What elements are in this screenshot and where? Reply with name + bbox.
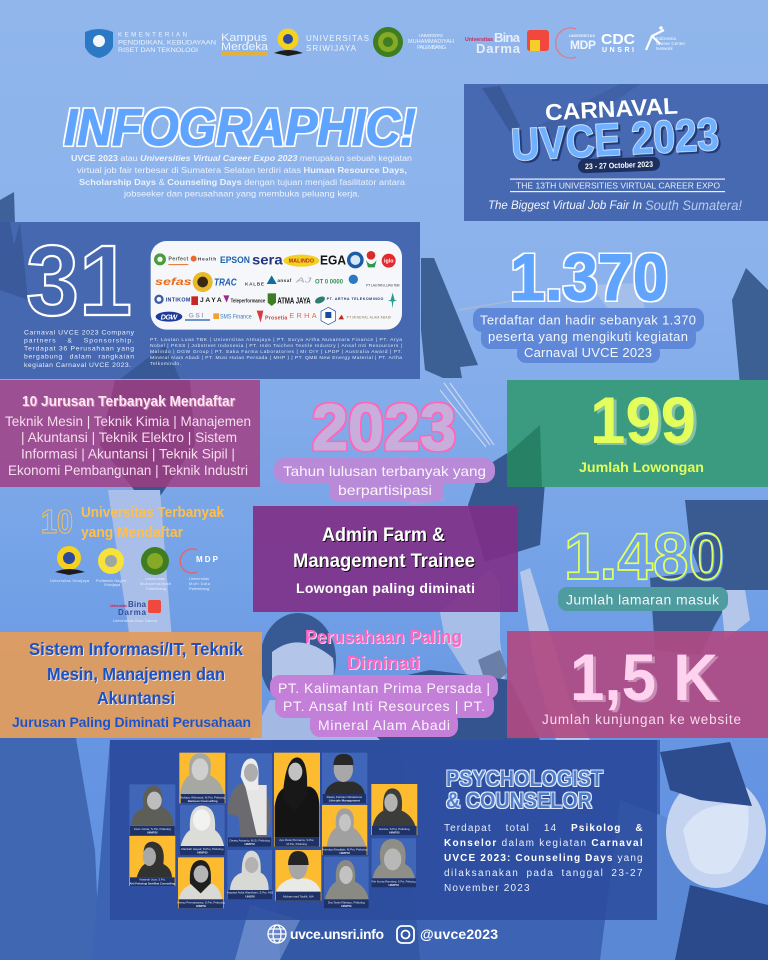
panel: 31 company partners bbox=[0, 222, 420, 379]
panel: 1,5 K website visits bbox=[507, 631, 768, 738]
panel: Carnaval UVCE 2023 banner bbox=[464, 84, 768, 221]
portrait: Hanna: Hanna, S.Psi, Psikolog bbox=[379, 827, 410, 831]
icon: globe bbox=[268, 925, 286, 943]
sponsor list text: Nobel | PKSS | Jobstreet Indonesia | PT. Indo Taichen Textile Industry | Ansaf Inti Resourcers | bbox=[150, 343, 402, 349]
logo: Kampus Merdeka: Kampus bbox=[221, 32, 268, 44]
counselor description: Terdapat total 14 Psikolog & bbox=[444, 823, 643, 834]
date pill: 23 - 27 October 2023 bbox=[585, 160, 654, 171]
portrait: Anindya Khadijah: Anindya Khadijah, M.Psi, Psikolog bbox=[322, 847, 368, 851]
portrait: Anindya Khadijah bbox=[322, 805, 368, 855]
portrait: Muhammad Taufik: Muhammad Taufik, MA bbox=[283, 895, 314, 899]
portrait: Hayatul Aulia: Hayatul Aulia Wardhani, S.Psi, MSi bbox=[227, 891, 273, 895]
sponsor row 3: PT. ARTHA TELEKOMINDO bbox=[327, 297, 383, 301]
university: Bina Darma: Darma bbox=[118, 608, 147, 617]
logo: Muhammadiyah Palembang: UNIVERSITAS bbox=[419, 33, 443, 38]
stat: Perusahaan Paling Diminati bbox=[270, 627, 498, 737]
logo: Muhammadiyah Palembang: MUHAMMADIYAH bbox=[408, 39, 454, 45]
partners caption: Terdapat 36 Perusahaan yang bbox=[24, 346, 134, 352]
partners caption: Carnaval UVCE 2023 Company bbox=[24, 330, 135, 336]
sponsor row 3: INTIKOM bbox=[166, 297, 191, 303]
stat: 1.370 participants bbox=[473, 240, 704, 363]
sponsor row 3 bbox=[154, 293, 397, 309]
sponsor row 2: ansaf bbox=[277, 278, 292, 283]
sponsor row 2: PT LAUTAN LUAS TBK bbox=[366, 284, 401, 288]
panel: 10 Jurusan Terbanyak Mendaftar bbox=[0, 380, 260, 487]
caption: Lowongan paling diminati bbox=[296, 580, 475, 596]
sponsor row 1: sera bbox=[252, 252, 283, 268]
counselor description: November 2023 bbox=[444, 883, 530, 894]
heading: UVCE 2023: UVCE 2023 bbox=[510, 109, 720, 170]
heading: CARNAVAL: CARNAVAL bbox=[544, 92, 679, 125]
portrait: Hasanah: Ahli Psikologi Sertifikat Counselling bbox=[130, 882, 176, 886]
tagline: The Biggest Virtual Job Fair In bbox=[488, 200, 642, 212]
major list: Mesin, Manajemen dan bbox=[47, 664, 225, 684]
panel: 10 universitas terbanyak bbox=[41, 503, 225, 623]
sponsor row 1: Perfect bbox=[168, 257, 189, 263]
portrait: Nessy Permatasary: Nessy Permatasary, S.Psi, Psikolog bbox=[177, 900, 225, 904]
heading: Universitas Terbanyak bbox=[81, 505, 225, 521]
major list bbox=[29, 639, 243, 708]
logo: Kementerian: KEMENTERIAN bbox=[118, 32, 187, 38]
sponsor row 4: DGW bbox=[161, 312, 178, 321]
sponsor row 2: KALBE bbox=[245, 282, 264, 287]
university: Sriwijaya bbox=[50, 546, 90, 583]
list of majors: Ekonomi Pembangunan | Teknik Industri bbox=[8, 462, 248, 478]
portrait: Deasy Arisanty bbox=[227, 753, 272, 847]
portrait: Deasy Febriani: Lifestyle Management bbox=[329, 799, 360, 803]
university: Sriwijaya: Universitas Sriwijaya bbox=[50, 579, 90, 583]
company pills bbox=[270, 675, 498, 737]
stat: 1.480 applications: 1.480 bbox=[564, 519, 724, 593]
big number 199: 199 bbox=[590, 383, 696, 457]
portrait: Intan Juniar bbox=[129, 784, 175, 835]
portrait: Ayu Dewi: Ayu Dewi Purnama, S.Psi, bbox=[279, 838, 314, 842]
sponsor row 4: ERHA bbox=[289, 311, 317, 320]
portrait: Hasanah bbox=[129, 836, 176, 886]
university: MDP: Palembang bbox=[189, 587, 209, 591]
sponsor row 3: ATMA JAYA bbox=[277, 297, 311, 306]
portrait: Muhammad Taufik bbox=[275, 850, 321, 901]
sponsor list text bbox=[150, 337, 402, 367]
counselor description: UVCE 2023: Counseling Days yang bbox=[444, 853, 643, 864]
panel: Admin Farm and Management Trainee: Management Trainee bbox=[293, 551, 475, 572]
portrait: Rahayu Wibowati: Rahayu Wibowati, M.Psi, Psikolog bbox=[180, 795, 226, 799]
portrait: Hasanah: Hasanah Uyun, S.Psi, bbox=[139, 878, 166, 882]
university: MDP: MDP bbox=[196, 555, 219, 564]
university: Politeknik Negeri Sriwijaya bbox=[96, 548, 126, 587]
panel: Admin Farm and Management Trainee bbox=[253, 506, 518, 612]
logo: CDC UNSRI: CDC bbox=[601, 31, 635, 48]
logo: Indonesia Career Center Network bbox=[646, 26, 686, 51]
logo: MDP bbox=[556, 28, 596, 58]
university: Bina Darma: Bina bbox=[128, 600, 147, 609]
portrait: Anindya Khadijah: HIMPSI bbox=[340, 851, 350, 855]
caption text: Carnaval UVCE 2023 bbox=[524, 345, 652, 360]
panel: Sistem Informasi jurusan paling diminati bbox=[0, 632, 262, 738]
logo: Indonesia Career Center Network: Network bbox=[656, 46, 674, 51]
caption text bbox=[480, 312, 696, 360]
portrait: Hanna: HIMPSI bbox=[389, 831, 400, 835]
caption pill bbox=[558, 587, 728, 611]
university: Politeknik Negeri Sriwijaya: Sriwijaya bbox=[104, 583, 121, 587]
caption text: berpartisipasi bbox=[338, 482, 432, 498]
logo: Kementerian bbox=[85, 29, 216, 58]
list of majors: Informasi | Akuntansi | Teknik Sipil | bbox=[21, 446, 235, 462]
logo: MDP: UNIVERSITAS bbox=[569, 34, 595, 38]
sponsor row 1: iglo bbox=[384, 259, 394, 265]
panel: Carnaval UVCE 2023 banner: South Sumatera! bbox=[645, 197, 742, 213]
counselor description: dilaksanakan pada tanggal 23-27 bbox=[444, 868, 643, 879]
counselor description: Konselor dalam kegiatan Carnaval bbox=[444, 838, 643, 849]
job title: Admin Farm & bbox=[322, 525, 445, 546]
intro text block: Scholarship Days & Counseling Days dengan tujuan menjadi fasilitator antara bbox=[79, 177, 405, 187]
portrait: Deasy Arisanty: Deasy Arisanty, M.Si, Psikolog bbox=[230, 838, 270, 842]
partners caption bbox=[24, 330, 135, 369]
university: Muhammadiyah Palembang bbox=[140, 547, 171, 591]
sponsor list text: Telkomindo. bbox=[150, 361, 181, 367]
stat: 2023 graduation year: 2023 bbox=[312, 390, 456, 464]
logo: Universitas Sriwijaya: SRIWIJAYA bbox=[306, 44, 357, 53]
logo: Muhammadiyah Palembang: PALEMBANG bbox=[417, 45, 446, 51]
portrait: Mardiah Hayati: Mardiah Hayati, M.Psi, Psikolog bbox=[181, 847, 224, 851]
heading: Psychologist and Counselor bbox=[446, 766, 604, 813]
heading: Psychologist and Counselor: & COUNSELOR bbox=[446, 788, 592, 813]
logo: Universitas Bina Darma: Universitas bbox=[465, 37, 493, 43]
portrait: Fitri Kurnia: Fitri Kurnia Ramdany, S.Psi, Psikolog bbox=[372, 879, 416, 883]
logo: Universitas Bina Darma: Bina bbox=[494, 30, 521, 45]
sponsor row 4: GSI bbox=[189, 312, 203, 319]
logo: Kampus Merdeka bbox=[221, 32, 269, 56]
sponsor row 3: JAYA bbox=[200, 297, 222, 304]
caption: Jumlah Lowongan bbox=[579, 459, 704, 475]
logo: CDC UNSRI: UNSRI bbox=[602, 47, 634, 54]
logo: Universitas Bina Darma: Darma bbox=[476, 41, 521, 56]
portrait: Hayatul Aulia bbox=[227, 850, 273, 899]
website address: uvce.unsri.info bbox=[290, 926, 384, 942]
logo: Universitas Bina Darma bbox=[465, 30, 549, 56]
list of majors: Teknik Mesin | Teknik Kimia | Manajemen bbox=[5, 413, 251, 429]
university: Politeknik Negeri Sriwijaya: Politeknik Negeri bbox=[96, 579, 126, 583]
icon: instagram bbox=[397, 926, 414, 943]
sponsor logo card bbox=[151, 241, 402, 330]
company text bbox=[278, 680, 490, 733]
university: MDP bbox=[180, 549, 219, 591]
university: MDP: Multi Data bbox=[189, 582, 211, 586]
portrait: Hayatul Aulia: UNSRI bbox=[245, 894, 255, 898]
sponsor row 4 bbox=[156, 307, 391, 325]
portrait: Fitri Kurnia: HIMPSI bbox=[389, 883, 399, 887]
big number: 1,5 K bbox=[570, 640, 718, 714]
logo: Kampus Merdeka: Merdeka bbox=[221, 41, 269, 53]
portrait: Nessy Permatasary bbox=[177, 857, 225, 908]
header logo strip bbox=[85, 26, 686, 58]
caption: Jumlah lamaran masuk bbox=[566, 592, 720, 608]
stat: 2023 graduation year bbox=[274, 390, 495, 502]
university: Bina Darma: Universitas bbox=[110, 604, 127, 608]
logo: Universitas Sriwijaya: UNIVERSITAS bbox=[306, 34, 369, 43]
panel: 199 Jumlah Lowongan bbox=[507, 380, 768, 487]
portrait: Deasy Arisanty: HIMPSI bbox=[245, 842, 255, 846]
portrait: Fitri Kurnia bbox=[372, 838, 416, 887]
university: MDP: Universitas bbox=[189, 577, 209, 581]
caption: Jurusan Paling Diminati Perusahaan bbox=[12, 714, 251, 730]
panel: 10 universitas terbanyak: yang Mendaftar bbox=[81, 525, 183, 541]
sponsor row 1 bbox=[154, 251, 396, 268]
logo: Indonesia Career Center Network: Indonesia bbox=[656, 36, 676, 41]
sponsor list text: Malindo | DGW Group | PT. Saka Farma Laboratories | Mr DIY | LPDP | Australia Award | PT. bbox=[150, 349, 402, 355]
big number 31: 31 bbox=[26, 225, 132, 337]
sponsor row 2: TRAC bbox=[214, 278, 237, 289]
portrait: Ayu Dewi: M.Psi, Psikolog bbox=[286, 842, 307, 846]
counselor description bbox=[444, 823, 643, 894]
outlined number 10: 10 bbox=[41, 503, 73, 540]
company text: PT. Ansaf Inti Resources | PT. bbox=[283, 698, 485, 714]
major list: Akuntansi bbox=[97, 688, 175, 708]
caption text: Tahun lulusan terbanyak yang bbox=[283, 463, 486, 479]
logo: Kementerian: PENDIDIKAN, KEBUDAYAAN bbox=[118, 39, 216, 46]
footer: website and instagram bbox=[268, 925, 498, 943]
sponsor row 2 bbox=[155, 272, 401, 292]
heading: Diminati bbox=[347, 653, 420, 673]
portrait: Dra. Tarini: Dra.Tarini Rahayu, Psikolog bbox=[328, 900, 365, 904]
counselor portrait grid bbox=[129, 753, 417, 908]
caption pills bbox=[274, 458, 495, 502]
portrait: Intan Juniar: HIMPSI bbox=[147, 831, 158, 835]
university: Muhammadiyah Palembang: Muhammadiyah bbox=[140, 582, 171, 586]
sponsor row 1: EPSON bbox=[220, 255, 250, 265]
sponsor row 3: Teleperformance bbox=[231, 299, 265, 305]
university: Bina Darma bbox=[110, 600, 161, 623]
logo: MDP: MDP bbox=[570, 38, 596, 52]
intro text block: UVCE 2023 atau Universities Virtual Career Expo 2023 merupakan sebuah kegiatan bbox=[71, 153, 412, 163]
university: Muhammadiyah Palembang: Universitas bbox=[145, 577, 165, 581]
partners caption: partners & Sponsorship. bbox=[24, 338, 134, 344]
portrait: Rahayu Wibowati bbox=[179, 753, 226, 803]
portrait: Deasy Febriani: Deasy Febriani Wicaksono bbox=[327, 795, 362, 799]
date pill bbox=[578, 157, 660, 173]
caption text: peserta yang mengikuti kegiatan bbox=[488, 329, 688, 344]
sponsor row 1: EGA bbox=[320, 253, 346, 267]
sponsor row 4: Prosetia bbox=[265, 315, 287, 321]
list of majors bbox=[5, 413, 251, 478]
portrait: Rahayu Wibowati: Bantuan Counselling bbox=[188, 799, 218, 803]
heading: Perusahaan Paling bbox=[305, 627, 462, 647]
portrait: Hanna bbox=[371, 784, 417, 835]
portrait: Nessy Permatasary: HIMPSI bbox=[196, 904, 206, 908]
sponsor row 2: AJ bbox=[294, 276, 312, 285]
instagram handle: @uvce2023 bbox=[420, 926, 498, 942]
portrait: Dra. Tarini bbox=[324, 857, 369, 908]
intro text block: jobseeker dan perusahaan yang membuka peluang kerja. bbox=[123, 188, 360, 198]
logo: Indonesia Career Center Network: Career Center bbox=[656, 41, 686, 46]
sponsor row 4: PT MINERAL ALAM ABADI bbox=[347, 316, 391, 320]
sponsor row 1: Health bbox=[198, 257, 216, 263]
stat: 1.370 participants: 1.370 bbox=[510, 240, 668, 314]
logo: Universitas Sriwijaya bbox=[274, 28, 369, 56]
logo: Kementerian: RISET DAN TEKNOLOGI bbox=[118, 47, 198, 54]
sponsor row 4: SMS Finance bbox=[220, 313, 252, 320]
intro text block bbox=[71, 153, 412, 198]
company text: PT. Kalimantan Prima Persada | bbox=[278, 680, 490, 696]
panel: Psychologist and Counselor bbox=[110, 740, 657, 920]
university: Bina Darma: Universitas Bina Darma bbox=[113, 619, 158, 623]
sponsor row 2: OT 0 0000 bbox=[315, 278, 343, 285]
portrait: Ayu Dewi bbox=[274, 753, 320, 847]
caption text: Terdaftar dan hadir sebanyak 1.370 bbox=[480, 312, 696, 328]
portrait: Mardiah Hayati bbox=[180, 805, 225, 855]
portrait: Mardiah Hayati: HIMPSI bbox=[197, 851, 208, 855]
university: Muhammadiyah Palembang: Palembang bbox=[146, 587, 166, 591]
panel heading: 10 Jurusan Terbanyak Mendaftar bbox=[22, 393, 235, 410]
sponsor list text: PT. Lautan Luas TBK | Universitas Atmajaya | PT. Surya Artha Nusantara Finance | PT. Arya bbox=[150, 337, 402, 343]
partners caption: bergabung dalam rangkaian bbox=[24, 354, 134, 360]
title: INFOGRAPHIC!: INFOGRAPHIC! bbox=[64, 99, 416, 157]
caption: Jumlah kunjungan ke website bbox=[542, 712, 741, 727]
heading bbox=[305, 627, 462, 673]
sponsor row 2: sefas bbox=[155, 277, 192, 288]
caption pills bbox=[473, 308, 704, 363]
list of majors: | Akuntansi | Teknik Elektro | Sistem bbox=[21, 429, 237, 445]
heading: Psychologist and Counselor: PSYCHOLOGIST bbox=[446, 766, 604, 791]
major list: Sistem Informasi/IT, Teknik bbox=[29, 639, 243, 659]
intro text block: virtual job fair terbesar di Sumatera Selatan terdiri atas Human Resource Days, bbox=[77, 165, 407, 175]
subtitle: THE 13TH UNIVERSITIES VIRTUAL CAREER EXPO bbox=[516, 180, 720, 190]
portrait: Deasy Febriani bbox=[322, 753, 367, 803]
partners caption: kegiatan Carnaval UVCE 2023. bbox=[24, 362, 131, 369]
logo: Muhammadiyah Palembang bbox=[373, 27, 454, 57]
company text: Mineral Alam Abadi bbox=[318, 717, 450, 733]
caption text bbox=[283, 463, 486, 498]
portrait: Intan Juniar: Intan Juniar, S.Psi, Psikolog bbox=[134, 827, 171, 831]
portrait: Dra. Tarini: HIMPSI bbox=[341, 904, 352, 908]
sponsor row 1: MALINDO bbox=[289, 259, 314, 265]
sponsor list text: Mineral Alam Abadi | PT. Musi Hutan Persada ( MHP ) | PT. QMB New Energy Material | PT. Artha bbox=[150, 355, 402, 361]
